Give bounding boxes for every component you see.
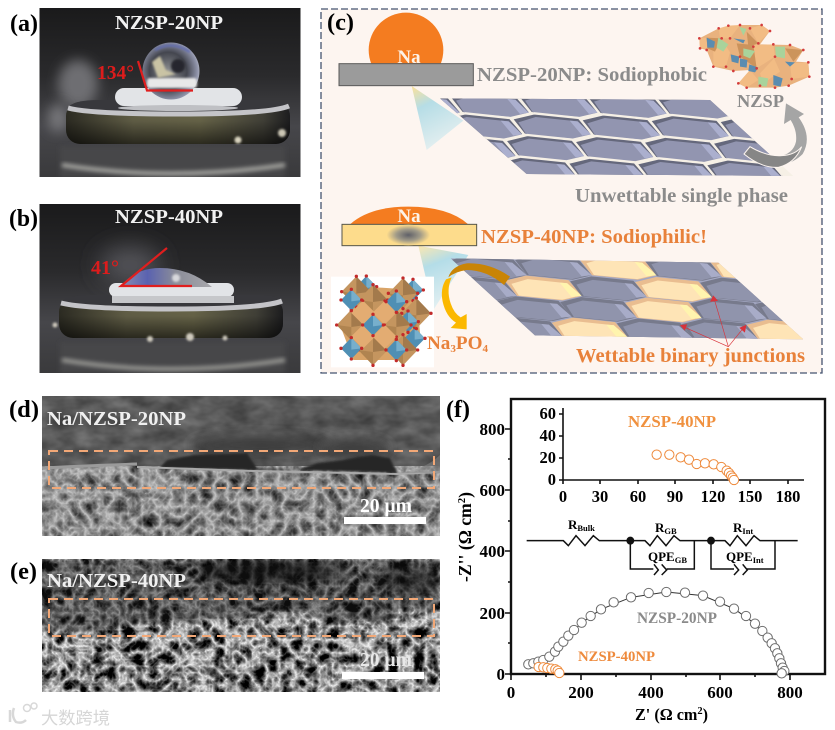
panel f: Nyquist plot [455,399,825,724]
x axis title: 2 [697,705,703,717]
panel label (e): (e) [10,559,37,585]
x axis title: ) [703,705,708,724]
contact angle 134 degrees: 134° [97,63,134,84]
y axis tick labels [480,420,505,684]
y axis tick labels: 800 [480,420,505,439]
scale bar label 20 μm: 20 μm [360,496,412,517]
hexagonal grain sheet: unwettable single phase [440,98,793,176]
label Na3PO4: 3 [450,343,456,355]
x axis tick labels: 600 [707,683,733,702]
inset x tick labels: 180 [776,487,800,506]
inset x tick labels: 150 [738,487,762,506]
panel label (f): (f) [446,397,470,423]
inset y tick labels: 20 [540,448,556,467]
inset x tick labels: 120 [701,487,725,506]
inset x tick labels: 30 [592,487,608,506]
x axis tick labels: 200 [568,683,594,702]
y axis tick labels: 0 [496,665,505,684]
label Na/NZSP-20NP: Na/NZSP-20NP [47,408,186,430]
label NZSP: NZSP [737,91,784,111]
label Na3PO4: PO [456,333,482,354]
x axis tick labels: 800 [777,683,803,702]
red pointer arrows to junctions [681,296,746,347]
data series NZSP-40NP [534,662,564,678]
label Na on spread layer: Na [397,206,421,227]
x axis tick labels: 0 [507,683,515,702]
circuit label R Bulk: R [568,517,577,532]
scale bar label 20 μm: 20 μm [360,650,412,671]
watermark [10,703,110,729]
panel label (a): (a) [10,11,38,37]
title: NZSP-20NP: NZSP-20NP [115,12,223,34]
series label NZSP-20NP: NZSP-20NP [637,610,718,627]
data series NZSP-20NP [524,587,789,678]
y axis tick labels: 200 [480,604,505,623]
label Na3PO4: Na [427,333,450,354]
y axis tick labels: 600 [480,481,505,500]
contact angle 41 degrees: 41° [91,257,119,279]
inset y tick labels: 0 [548,470,556,489]
heading: NZSP-20NP Sodiophobic: NZSP-20NP: Sodiophobic [477,64,707,86]
circuit label QPE Int: QPE [726,549,753,564]
inset x tick labels [559,487,800,506]
panel label (c): (c) [327,10,354,36]
inset x tick labels: 90 [667,487,683,506]
schematic: sodiophobic sodium droplet on grey pellet [339,13,473,150]
heading: NZSP-40NP Sodiophilic: NZSP-40NP: Sodiophilic! [481,226,707,248]
label Na3PO4: 4 [482,343,489,355]
panel label (d): (d) [9,397,39,423]
circuit label R Bulk: Bulk [577,523,595,533]
inset plot axes [559,408,804,484]
panel c: wetting schematic [321,9,832,373]
series label NZSP-40NP: NZSP-40NP [578,649,655,665]
circuit label QPE GB: QPE [648,549,675,564]
inset x tick labels: 60 [630,487,646,506]
panel a: photo of sodium droplet on NZSP-20NP [39,8,301,177]
inset data points orange [652,450,739,485]
inset series label NZSP-40NP: NZSP-40NP [628,412,716,431]
title: NZSP-40NP: NZSP-40NP [115,206,223,228]
circuit label R Int: Int [742,526,753,536]
panel b: photo of sodium droplet on NZSP-40NP [39,204,301,373]
caption: Wettable binary junctions: Wettable binary junctions [576,345,805,367]
circuit label QPE Int: Int [753,555,764,565]
caption: Unwettable single phase: Unwettable single phase [575,185,788,207]
y axis title: -Z'' (Ω cm [455,502,475,582]
schematic: sodiophilic sodium layer on yellow pellet [342,207,477,310]
x axis tick labels: 400 [638,683,664,702]
inset y tick labels: 40 [540,426,556,445]
y axis tick labels: 400 [480,542,505,561]
hexagonal grain sheet: wettable binary junctions [451,258,803,340]
crystal structure: Na3PO4 [331,274,434,367]
circuit label R Int: R [733,520,742,535]
circuit label R GB: GB [664,526,677,536]
inset x tick labels: 0 [559,487,567,506]
y axis title: ) [455,492,476,498]
coin [66,102,290,144]
panel e: SEM cross section Na/NZSP-40NP [42,559,445,692]
label Na/NZSP-40NP: Na/NZSP-40NP [47,570,186,592]
equivalent circuit diagram [527,536,798,575]
grey curved arrow to NZSP crystal [744,103,807,167]
label Na on droplet: Na [397,47,421,68]
x axis tick labels [507,683,803,702]
crystal structure: NZSP [698,24,811,89]
inset y tick labels [540,404,556,489]
watermark: 大数跨境 [41,704,110,729]
brown and yellow curved arrows [442,263,510,329]
circuit label R GB: R [655,520,664,535]
y axis title: 2 [456,497,468,503]
panel d: SEM cross section Na/NZSP-20NP [42,396,440,536]
plot frame and ticks [505,399,825,680]
inset y tick labels: 60 [540,404,556,423]
circuit label QPE GB: GB [675,555,687,565]
x axis title: Z' (Ω cm [635,705,701,724]
panel label (b): (b) [9,206,38,232]
